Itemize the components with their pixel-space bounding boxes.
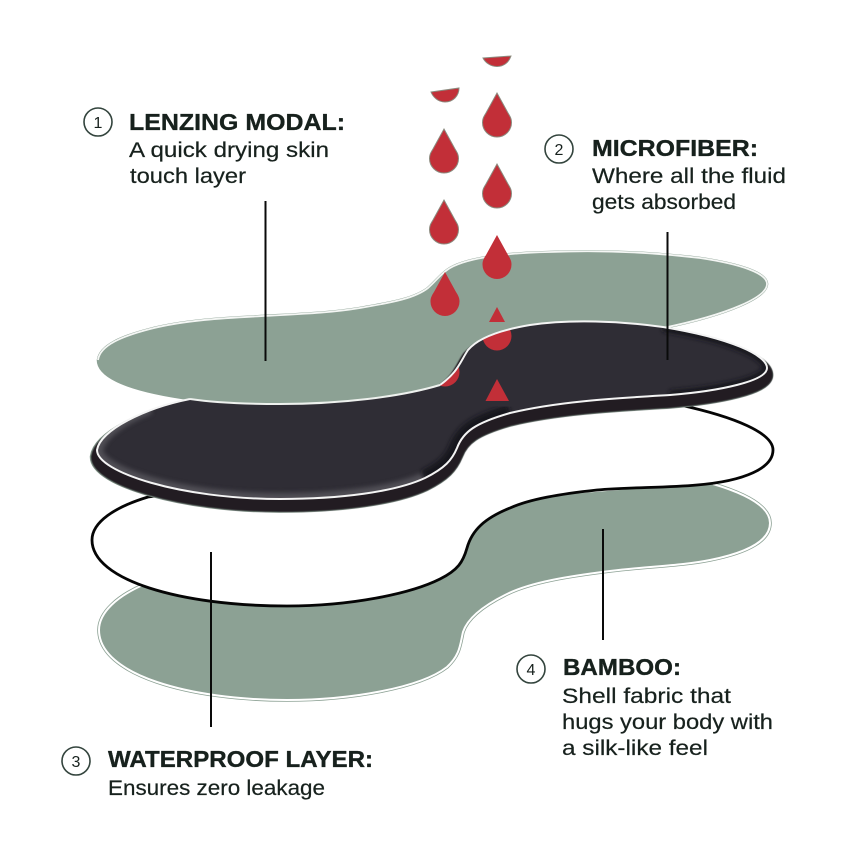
label 4: bamboo bbox=[517, 654, 773, 760]
label 4: bamboo: 4 bbox=[527, 662, 536, 679]
label 4: bamboo: BAMBOO: bbox=[563, 654, 681, 680]
label 1: lenzing modal bbox=[84, 108, 345, 188]
label 3: waterproof layer bbox=[62, 746, 373, 800]
label 2: microfiber: MICROFIBER: bbox=[592, 135, 758, 161]
label 3: waterproof layer: WATERPROOF LAYER: bbox=[108, 746, 373, 772]
label 2: microfiber: 2 bbox=[555, 142, 564, 159]
triangle drop tip bbox=[486, 379, 509, 401]
drops on green layer bbox=[430, 235, 512, 322]
leader line 2 bbox=[666, 232, 668, 360]
leader line 4 bbox=[602, 529, 604, 640]
label 2: microfiber: Where all the fluid bbox=[592, 165, 786, 188]
leader line 1 bbox=[264, 201, 266, 361]
label 1: lenzing modal: touch layer bbox=[130, 165, 246, 188]
label 3: waterproof layer: 3 bbox=[72, 754, 81, 771]
layer 1: lenzing modal green sheet bbox=[98, 251, 767, 404]
layer 2: microfiber dark layer bbox=[96, 321, 767, 506]
label 1: lenzing modal: A quick drying skin bbox=[129, 139, 329, 162]
drops falling bbox=[430, 56, 512, 244]
layer 4: bamboo green shell bbox=[99, 484, 770, 700]
label 3: waterproof layer: Ensures zero leakage bbox=[108, 777, 325, 800]
label 2: microfiber bbox=[545, 135, 786, 214]
label 1: lenzing modal: 1 bbox=[94, 115, 103, 132]
label 2: microfiber: gets absorbed bbox=[592, 191, 736, 214]
label 4: bamboo: Shell fabric that bbox=[562, 685, 731, 708]
layer 3: waterproof white layer bbox=[92, 390, 773, 606]
label 1: lenzing modal: LENZING MODAL: bbox=[129, 109, 345, 135]
label 4: bamboo: a silk-like feel bbox=[562, 737, 708, 760]
red drop fragments absorbed bbox=[440, 330, 512, 386]
leader line 3 bbox=[210, 552, 212, 727]
label 4: bamboo: hugs your body with bbox=[562, 711, 773, 734]
